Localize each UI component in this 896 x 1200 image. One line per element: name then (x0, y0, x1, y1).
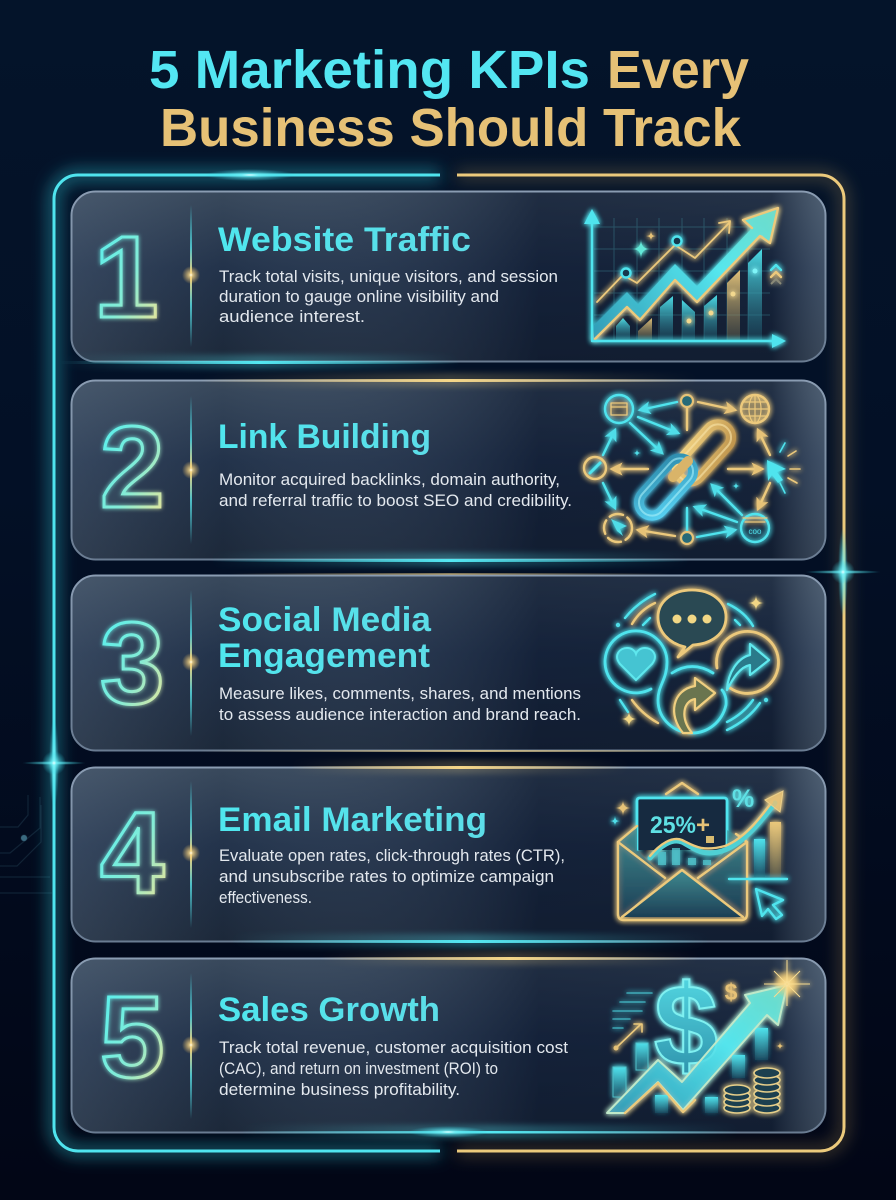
description 1: Track total visits, unique visitors, and session (219, 268, 558, 286)
icon: sales growth (607, 960, 810, 1113)
card 4: email marketing (72, 768, 826, 942)
card 5: sales growth (72, 958, 826, 1132)
description 4 (219, 847, 565, 907)
description 4: effectiveness. (219, 889, 312, 907)
card 1: website traffic (72, 192, 826, 362)
divider 2 (182, 396, 200, 544)
description 4: Evaluate open rates, click-through rates (CTR), (219, 847, 565, 865)
heading 5: Sales Growth (218, 991, 440, 1029)
description 1 (219, 268, 558, 326)
description 5 (219, 1039, 568, 1099)
divider 5 (182, 973, 200, 1119)
heading 1: Website Traffic (218, 221, 471, 259)
number 5: 5 (100, 972, 165, 1102)
heading 3: Engagement (218, 637, 430, 675)
description 4: and unsubscribe rates to optimize campaign (219, 868, 554, 886)
description 3 (219, 685, 581, 724)
card 3: social media engagement (72, 576, 826, 750)
icon: sales growth: $ (654, 962, 718, 1090)
icon: chain network (584, 395, 800, 544)
icon: sales growth: $ (725, 979, 738, 1005)
description 5: Track total revenue, customer acquisition cost (219, 1039, 568, 1057)
title: 5 Marketing KPIs (149, 40, 590, 100)
divider 1 (182, 205, 200, 347)
icon: chain network: coo (749, 527, 762, 536)
title (149, 40, 749, 158)
description 2: Monitor acquired backlinks, domain authority, (219, 471, 560, 489)
number 2: 2 (100, 402, 165, 532)
description 2: and referral traffic to boost SEO and credibility. (219, 492, 572, 510)
divider 3 (182, 590, 200, 736)
frame light flares (22, 169, 881, 1138)
description 2 (219, 471, 572, 510)
number 4: 4 (100, 788, 165, 918)
icon: social bubbles (605, 590, 778, 733)
heading 3 (218, 601, 432, 675)
card 2: link building (72, 380, 826, 560)
heading 4: Email Marketing (218, 801, 487, 839)
description 1: duration to gauge online visibility and (219, 288, 499, 306)
description 3: to assess audience interaction and brand reach. (219, 706, 581, 724)
description 5: determine business profitability. (219, 1081, 460, 1099)
circuit traces left (0, 795, 52, 893)
icon: growth chart (584, 208, 786, 348)
glowing card edge accents (60, 355, 760, 1139)
icon: email envelope: + (696, 812, 710, 839)
number 3: 3 (100, 598, 165, 728)
icon: email envelope: % (732, 785, 754, 813)
divider 4 (182, 781, 200, 928)
number 1: 1 (94, 212, 159, 342)
icon: email envelope: 25% (650, 812, 696, 839)
description 3: Measure likes, comments, shares, and mentions (219, 685, 581, 703)
title: Business Should Track (160, 98, 742, 158)
description 1: audience interest. (219, 308, 365, 326)
icon: email envelope (610, 783, 787, 920)
outer frame (54, 175, 844, 1151)
title: Every (607, 40, 749, 100)
description 5: (CAC), and return on investment (ROI) to (219, 1060, 498, 1078)
heading 3: Social Media (218, 601, 432, 639)
heading 2: Link Building (218, 418, 431, 456)
